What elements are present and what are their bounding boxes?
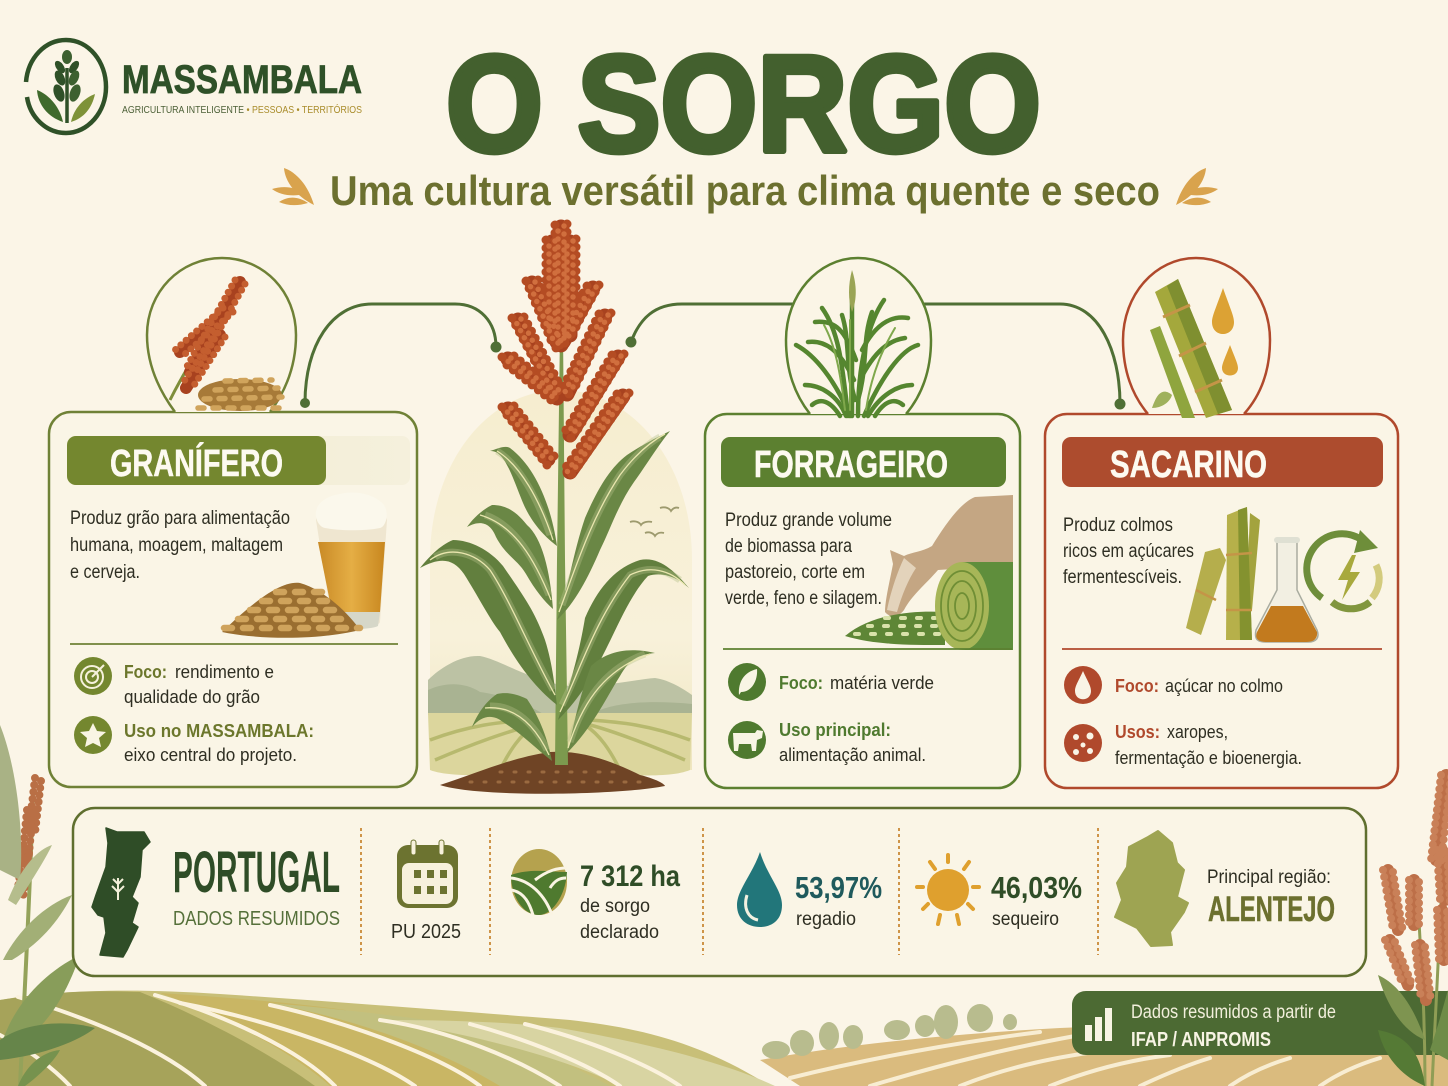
connector: left card to plant bbox=[300, 304, 502, 408]
hectares figure: 7 312 ha bbox=[580, 860, 680, 893]
field bbox=[428, 713, 692, 776]
soil bbox=[440, 752, 665, 794]
use text: alimentação animal. bbox=[779, 745, 926, 765]
left decorative sorghum plant bbox=[0, 725, 95, 1086]
panicle bbox=[502, 224, 629, 478]
icon: gold leaf right bbox=[1176, 168, 1218, 205]
header bar: FORRAGEIRO bbox=[754, 444, 948, 486]
description bbox=[70, 508, 290, 583]
icon: target bbox=[74, 657, 112, 695]
hectares figure: declarado bbox=[580, 922, 659, 943]
panel: Forrageiro bbox=[705, 258, 1020, 788]
description: pastoreio, corte em bbox=[725, 562, 865, 583]
title: O SORGO bbox=[446, 28, 1041, 181]
Alentejo map bbox=[1115, 831, 1188, 946]
use text: Uso no MASSAMBALA: bbox=[124, 721, 314, 741]
icon: water drop bbox=[737, 852, 782, 927]
irrigated share: 53,97% bbox=[795, 870, 882, 905]
description bbox=[725, 510, 892, 609]
divider bbox=[1062, 648, 1382, 650]
focus text: qualidade do grão bbox=[124, 687, 260, 707]
icon: gold leaf left bbox=[272, 168, 314, 205]
focus text: rendimento e bbox=[175, 662, 274, 682]
panel: Granífero bbox=[49, 258, 417, 787]
Portugal map bbox=[92, 828, 150, 957]
medallion bbox=[147, 258, 296, 412]
focus text: Foco: bbox=[1115, 676, 1159, 696]
rainfed share: sequeiro bbox=[992, 909, 1059, 930]
icon: molecules bbox=[1064, 724, 1102, 762]
description: verde, feno e silagem. bbox=[725, 588, 882, 609]
focus text: açúcar no colmo bbox=[1165, 676, 1283, 696]
focus text: Foco: bbox=[124, 662, 167, 682]
source callout: IFAP / ANPROMIS bbox=[1131, 1029, 1271, 1051]
source callout: Dados resumidos a partir de bbox=[1131, 1002, 1336, 1023]
use text bbox=[779, 720, 926, 765]
year label: PU 2025 bbox=[391, 921, 461, 943]
focus text: Foco: bbox=[779, 673, 823, 693]
description: Produz grão para alimentação bbox=[70, 508, 290, 529]
irrigated share bbox=[795, 870, 882, 930]
header bar bbox=[1062, 437, 1383, 487]
illustration: cow and bale bbox=[845, 495, 1013, 650]
illustration: cane, flask, energy bbox=[1186, 507, 1379, 642]
medallion bbox=[1123, 258, 1270, 418]
logo wordmark: MASSAMBALA bbox=[122, 58, 362, 102]
uses text: xaropes, bbox=[1167, 722, 1228, 742]
main region: Principal região: bbox=[1207, 867, 1331, 888]
focus text bbox=[779, 673, 934, 693]
panel: central plant illustration bbox=[420, 224, 692, 794]
connector: plant to right cards bbox=[626, 304, 1126, 410]
source callout bbox=[1072, 991, 1448, 1055]
description: Produz grande volume bbox=[725, 510, 892, 531]
description: ricos em açúcares bbox=[1063, 541, 1194, 562]
uses text bbox=[1115, 722, 1302, 768]
landscape: right ochre fields and trees bbox=[760, 1004, 1448, 1086]
subheading: DADOS RESUMIDOS bbox=[173, 908, 340, 930]
uses text: Usos: bbox=[1115, 722, 1160, 742]
description: e cerveja. bbox=[70, 562, 140, 583]
leaves bbox=[420, 431, 689, 761]
icon: star bbox=[74, 716, 112, 754]
right decorative sorghum plant bbox=[1378, 775, 1448, 1086]
stem bbox=[555, 330, 568, 765]
panel: Sacarino bbox=[1045, 258, 1398, 788]
description: de biomassa para bbox=[725, 536, 852, 557]
header bar: SACARINO bbox=[1110, 444, 1267, 486]
icon: field circle bbox=[511, 849, 567, 915]
illustration: beer and grains bbox=[222, 492, 387, 638]
logo ring bbox=[26, 40, 106, 133]
logo bbox=[26, 40, 362, 133]
icon: cow bbox=[728, 721, 766, 759]
Portugal heading: PORTUGAL bbox=[173, 840, 340, 905]
logo tagline: AGRICULTURA INTELIGENTE • PESSOAS • TERRITÓRIOS bbox=[122, 103, 362, 116]
icon: bar chart bbox=[1085, 1008, 1112, 1041]
birds bbox=[630, 507, 679, 536]
icon: droplet bbox=[1064, 666, 1102, 704]
uses text: fermentação e bioenergia. bbox=[1115, 748, 1302, 768]
focus text bbox=[1115, 676, 1283, 696]
hectares figure: de sorgo bbox=[580, 896, 650, 917]
description bbox=[1063, 515, 1194, 588]
watercolor arch background bbox=[430, 390, 692, 770]
description: fermentescíveis. bbox=[1063, 567, 1182, 588]
irrigated share: regadio bbox=[796, 909, 856, 930]
use text: Uso principal: bbox=[779, 720, 891, 740]
subtitle: Uma cultura versátil para clima quente e seco bbox=[330, 167, 1160, 214]
description: humana, moagem, maltagem bbox=[70, 535, 283, 556]
header bar: GRANÍFERO bbox=[110, 441, 283, 485]
rainfed share: 46,03% bbox=[991, 870, 1082, 905]
use text bbox=[124, 721, 314, 765]
description: Produz colmos bbox=[1063, 515, 1173, 536]
header bar bbox=[67, 436, 410, 485]
main region bbox=[1207, 867, 1335, 929]
icon: calendar bbox=[397, 840, 458, 908]
medallion bbox=[786, 258, 931, 416]
divider bbox=[70, 643, 398, 645]
use text: eixo central do projeto. bbox=[124, 745, 297, 765]
icon: sun bbox=[917, 855, 979, 924]
focus text: matéria verde bbox=[830, 673, 934, 693]
main region: ALENTEJO bbox=[1208, 890, 1335, 929]
logo plant icon bbox=[37, 50, 95, 123]
panel: Portugal summary data bbox=[73, 808, 1366, 976]
landscape: left striped fields bbox=[0, 991, 775, 1086]
divider bbox=[723, 648, 1012, 650]
distant hills bbox=[428, 656, 692, 715]
rainfed share bbox=[991, 870, 1082, 930]
hectares figure bbox=[580, 860, 680, 943]
icon: leaf bbox=[728, 663, 766, 701]
focus text bbox=[124, 662, 274, 707]
